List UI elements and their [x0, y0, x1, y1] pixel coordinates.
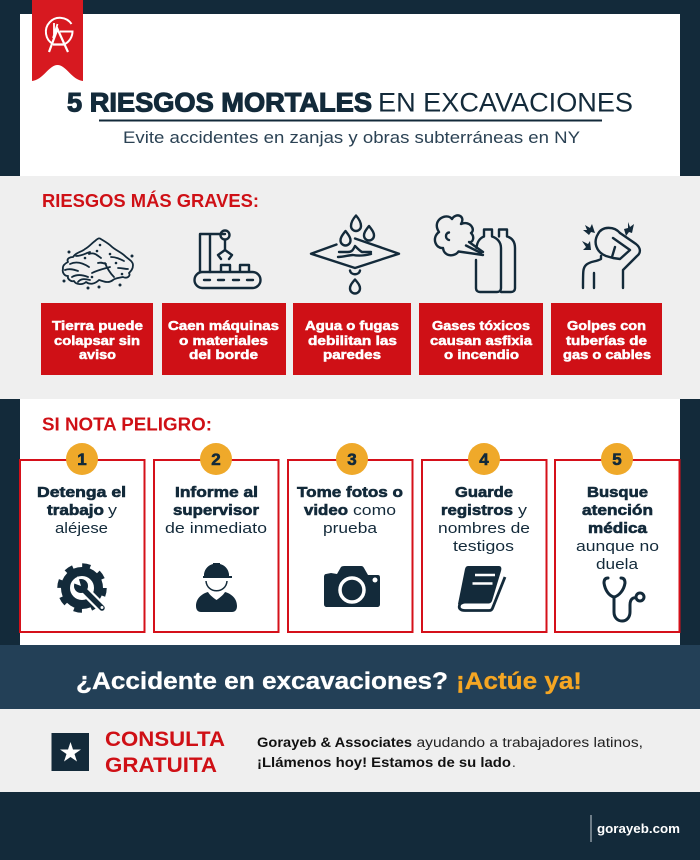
box: gases [419, 303, 543, 375]
box: agua: debilitan las [308, 334, 397, 348]
card 5: Busque [587, 484, 648, 501]
card 2: supervisor [173, 502, 259, 519]
card 2: Informe al [175, 484, 258, 501]
card 3: como [353, 502, 396, 519]
banner: call to action: ¡Actúe ya! [456, 668, 582, 695]
title: 5 RIESGOS MORTALES [67, 88, 372, 118]
card 4: nombres de [438, 520, 530, 537]
icon: water and wall [311, 216, 399, 294]
box: agua: Agua o fugas [305, 319, 399, 333]
subtitle: Evite accidentes en zanjas y obras subterráneas en NY [123, 128, 580, 147]
firm message: . [512, 755, 516, 770]
title [67, 88, 633, 118]
card 3: 3 [347, 450, 357, 469]
card 2 [154, 443, 278, 632]
card 3: prueba [323, 520, 378, 537]
card 5: atención [582, 502, 653, 519]
icon: star badge [52, 733, 89, 771]
box: agua [293, 303, 411, 375]
panel: consulta gratuita [0, 709, 700, 792]
card 1: Detenga el [37, 484, 126, 501]
card 4: testigos [453, 538, 514, 555]
box: máquinas [162, 303, 286, 375]
consulta heading: CONSULTA [105, 728, 225, 751]
icon: gear and wrench [60, 566, 104, 610]
banner: call to action [0, 645, 700, 709]
icon: book [458, 566, 505, 610]
box: gases: Gases tóxicos [432, 319, 530, 333]
card 4 [422, 443, 546, 632]
icon: conveyor and claw [194, 230, 260, 288]
box: golpes: tuberías de [566, 334, 647, 348]
firm message: ¡Llámenos hoy! Estamos de su lado [257, 755, 511, 770]
panel: si nota peligro [20, 399, 680, 645]
card 5 [555, 443, 680, 632]
box: tierra: Tierra puede [52, 319, 143, 333]
footer [0, 792, 700, 860]
icon: camera [324, 566, 380, 607]
panel: riesgos más graves [0, 176, 700, 399]
heading: riesgos: RIESGOS MÁS GRAVES: [42, 190, 259, 211]
card 4: y [518, 502, 528, 519]
box: máquinas: o materiales [179, 334, 268, 348]
box: gases: causan asfixia [430, 334, 533, 348]
card 3: video [304, 502, 348, 519]
box: máquinas: Caen máquinas [168, 319, 279, 333]
firm message [257, 735, 643, 770]
card 1: aléjese [55, 520, 108, 537]
card 3: Tome fotos o [297, 484, 403, 501]
card 5: médica [588, 520, 648, 537]
icon: stethoscope [604, 578, 644, 621]
logo ribbon [32, 0, 83, 81]
box: golpes: Golpes con [567, 319, 646, 333]
card 1 [20, 443, 144, 632]
box: golpes: gas o cables [563, 348, 651, 362]
card 4: Guarde [455, 484, 513, 501]
card 5: 5 [612, 450, 622, 469]
firm message: ayudando a trabajadores latinos, [416, 735, 643, 750]
icon: gas cylinders [435, 215, 515, 292]
consulta heading: GRATUITA [105, 754, 217, 777]
consulta heading [105, 728, 225, 777]
icon: worker with helmet [196, 563, 237, 612]
heading: peligro: SI NOTA PELIGRO: [42, 414, 212, 434]
box: tierra [41, 303, 153, 375]
box: golpes [551, 303, 662, 375]
banner: call to action: ¿Accidente en excavaciones? [76, 668, 448, 695]
card 1: y [108, 502, 118, 519]
icon: dirt pile [62, 238, 134, 290]
box: tierra: colapsar sin [54, 334, 140, 348]
card 5: duela [596, 556, 639, 573]
title: EN EXCAVACIONES [378, 88, 633, 118]
box: gases: o incendio [444, 348, 519, 362]
box: tierra: aviso [79, 348, 116, 362]
card 4: 4 [479, 450, 489, 469]
card 1: 1 [77, 450, 87, 469]
firm message: Gorayeb & Associates [257, 735, 412, 750]
box: agua: paredes [323, 348, 381, 362]
card 4: registros [441, 502, 513, 519]
card 3 [288, 443, 412, 632]
card 5: aunque no [576, 538, 659, 555]
card 2: 2 [211, 450, 221, 469]
card 1: trabajo [47, 502, 104, 519]
footer: gorayeb.com [597, 822, 680, 836]
card 2: de inmediato [165, 520, 267, 537]
box: máquinas: del borde [189, 348, 258, 362]
icon: head injury [582, 222, 640, 288]
panel: header [20, 0, 680, 176]
